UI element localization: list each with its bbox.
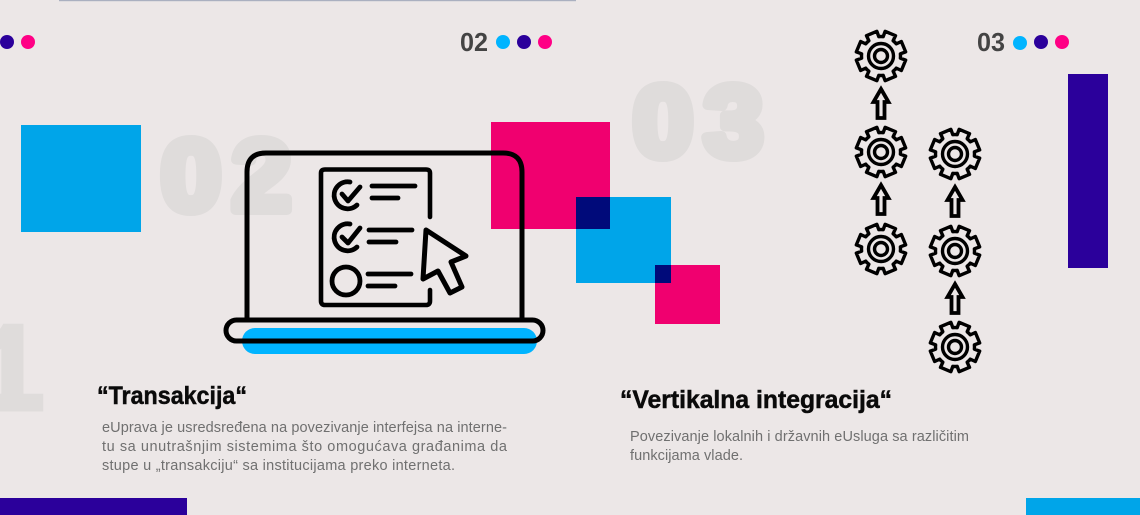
checklist row two	[334, 224, 412, 251]
cursor	[423, 230, 466, 293]
left pagination dots	[0, 35, 35, 49]
icon: gear hierarchy right column	[930, 129, 980, 372]
laptop highlight	[242, 328, 537, 354]
section marker 02	[460, 27, 552, 57]
icon: gear hierarchy left column	[856, 31, 906, 274]
text block: Vertikalna integracija: Povezivanje lokalnih i državnih eUsluga sa različitim	[630, 429, 969, 445]
ghost number 03: 0	[633, 66, 693, 178]
ghost number 02: 0	[161, 120, 221, 232]
bottom purple bar	[0, 498, 187, 515]
checklist row three	[332, 267, 411, 295]
checklist row one	[334, 182, 415, 209]
top rule	[59, 0, 576, 1]
heading: Transakcija: “Transakcija“	[97, 382, 247, 410]
text block: Transakcija: stupe u „transakciju“ sa institucijama preko interneta.	[102, 458, 455, 474]
ghost number 03: 3	[704, 66, 763, 178]
gear	[856, 31, 906, 81]
arrow	[948, 284, 962, 313]
laptop base	[226, 320, 543, 341]
gear	[856, 127, 906, 177]
text block: Transakcija	[102, 420, 508, 474]
arrow	[874, 89, 888, 118]
ghost number 03	[633, 66, 763, 178]
icon: laptop with checklist	[226, 153, 543, 354]
text block: Transakcija: eUprava je usredsređena na povezivanje interfejsa na interne-	[102, 420, 507, 436]
text block: Vertikalna integracija	[630, 429, 969, 464]
purple bar right	[1068, 74, 1108, 268]
heading: Vertikalna integracija: “Vertikalna integracija“	[620, 386, 892, 414]
marker number 03: 03	[977, 27, 1005, 57]
overlapping squares	[491, 122, 720, 324]
section marker 03	[977, 27, 1069, 57]
ghost number 02: 2	[232, 120, 291, 232]
text block: Transakcija: tu sa unutrašnjim sistemima što omogućava građanima da	[102, 439, 508, 455]
arrow	[874, 185, 888, 214]
bottom blue bar	[1026, 498, 1140, 515]
blue square left	[21, 125, 141, 232]
arrow	[948, 187, 962, 216]
gear	[930, 129, 980, 179]
marker number 02: 02	[460, 27, 488, 57]
laptop screen	[247, 153, 522, 319]
gear	[856, 224, 906, 274]
text block: Vertikalna integracija: funkcijama vlade.	[630, 448, 743, 464]
checklist sheet	[321, 170, 430, 305]
gear	[930, 322, 980, 372]
ghost number 02	[161, 120, 291, 232]
gear	[930, 226, 980, 276]
